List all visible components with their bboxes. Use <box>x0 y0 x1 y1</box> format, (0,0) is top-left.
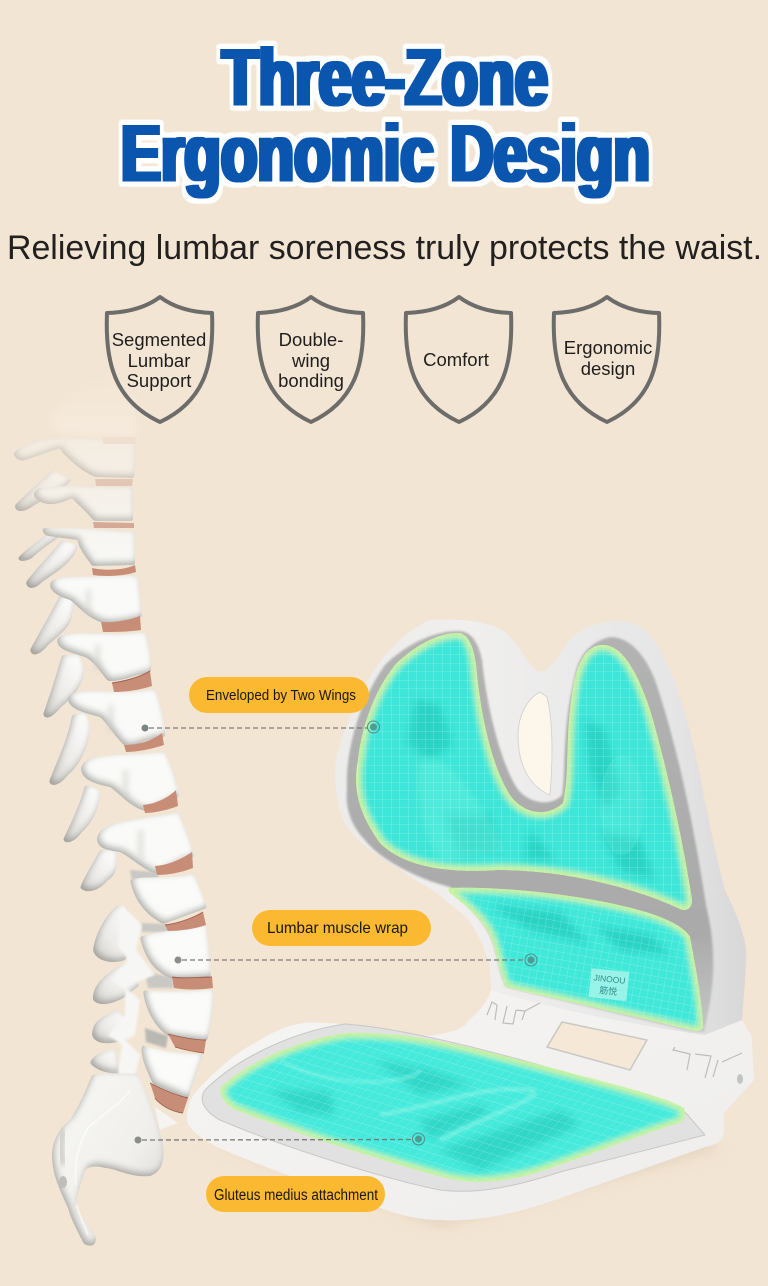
connector: gluteus line <box>134 1133 424 1145</box>
connector: wings line <box>142 721 380 733</box>
side peg <box>737 1074 743 1084</box>
fade of upper spine <box>0 350 145 560</box>
title <box>121 33 650 199</box>
seat cushion product <box>187 620 754 1228</box>
seat shell <box>187 620 754 1220</box>
connector: lumbar line <box>174 954 537 966</box>
seat tray recess <box>202 1024 705 1191</box>
shield: Double-wing bonding: Double- <box>279 329 343 350</box>
title: Three-Zone <box>222 33 548 123</box>
callout: Lumbar muscle wrap <box>252 910 431 946</box>
shield: Comfort: Comfort <box>423 349 489 370</box>
shield: Ergonomic design: Ergonomic <box>564 337 652 358</box>
product label: 筋悦 <box>599 984 618 997</box>
faded upper vertebrae <box>51 380 136 437</box>
hinge notches <box>487 1002 742 1078</box>
product label: JINOOU <box>593 972 626 986</box>
callout: Enveloped by Two Wings: Enveloped by Two Wings <box>206 687 356 704</box>
callout: Gluteus medius attachment <box>206 1176 385 1212</box>
carry handle slot <box>547 1022 647 1070</box>
sacrum details <box>76 1090 130 1235</box>
zone 1: two wings <box>356 633 692 910</box>
intervertebral discs <box>92 437 213 1113</box>
shield: Ergonomic design: design <box>581 358 635 379</box>
product label <box>589 968 629 1001</box>
zone 2: lumbar <box>448 888 703 1031</box>
disc dark edges <box>112 671 212 1113</box>
lumbar hole <box>518 692 552 795</box>
vertebra shading <box>88 590 143 858</box>
subtitle: Relieving lumbar soreness truly protects the waist. <box>7 229 762 267</box>
lower base <box>187 990 754 1220</box>
shield: Ergonomic design <box>554 297 659 422</box>
ground shadow <box>200 1130 720 1228</box>
shield: Comfort <box>406 297 511 422</box>
callout: Gluteus medius attachment: Gluteus medius attachment <box>214 1187 379 1204</box>
shield: Segmented Lumbar Support <box>107 297 212 422</box>
shield: Segmented Lumbar Support: Segmented <box>112 329 206 350</box>
shield: Double-wing bonding: wing <box>291 350 330 371</box>
zone 3: seat <box>220 1032 686 1182</box>
callout: Enveloped by Two Wings <box>189 677 369 713</box>
callout: Lumbar muscle wrap: Lumbar muscle wrap <box>267 920 408 937</box>
upper recess <box>347 631 713 1032</box>
shield: Segmented Lumbar Support: Support <box>127 370 191 391</box>
spine illustration <box>0 350 213 1246</box>
shield: Segmented Lumbar Support: Lumbar <box>128 350 190 371</box>
shield: Double-wing bonding: bonding <box>278 370 344 391</box>
shield: Double-wing bonding <box>258 297 363 422</box>
